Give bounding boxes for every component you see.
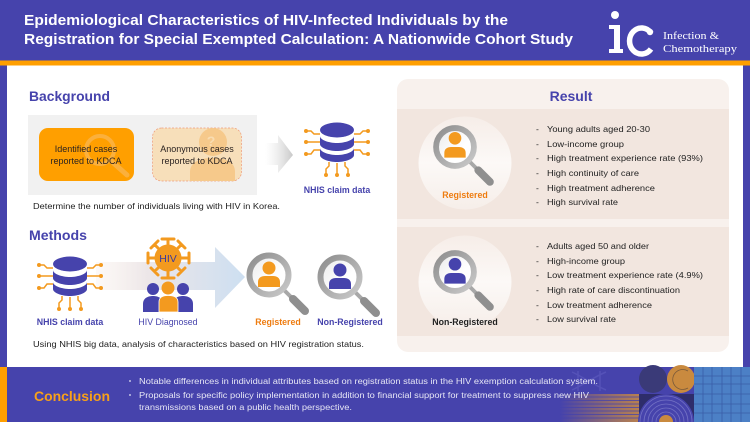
list: registered traits: High continuity of care — [547, 168, 639, 178]
anonymous cases card: Anonymous cases — [160, 144, 234, 154]
icon: non-registered magnifier — [320, 258, 376, 313]
decorative pattern — [560, 365, 750, 422]
journal logo: Infection & — [663, 31, 719, 42]
journal logo: Chemotherapy — [663, 44, 737, 55]
list: non-registered traits: - — [536, 300, 539, 310]
label: NHIS claim data: NHIS claim data — [37, 317, 103, 327]
list: non-registered traits: Low treatment experience rate (4.9%) — [547, 270, 703, 280]
list: registered traits: - — [536, 197, 539, 207]
icon: magnifier non-registered — [436, 253, 490, 307]
anonymous cases card: ? — [207, 133, 215, 149]
panel: background — [28, 88, 370, 211]
conclusion bullets: transmissions based on a public health perspective. — [139, 402, 352, 412]
label: NHIS claim data: NHIS claim data — [304, 185, 370, 195]
list: registered traits: Young adults aged 20-30 — [547, 124, 650, 134]
list: non-registered traits — [536, 241, 703, 324]
heading: background: Background — [29, 88, 110, 104]
methods statement: Using NHIS big data, analysis of characteristics based on HIV registration status. — [33, 339, 364, 349]
anonymous cases card — [152, 128, 242, 181]
list: registered traits: Low-income group — [547, 139, 624, 149]
conclusion bullets — [129, 376, 598, 412]
panel: conclusion — [0, 365, 750, 422]
icon: registered magnifier — [250, 256, 305, 311]
list: non-registered traits: - — [536, 285, 539, 295]
heading: result: Result — [550, 88, 593, 104]
list: non-registered traits: Adults aged 50 and older — [547, 241, 649, 251]
list: non-registered traits: High-income group — [547, 256, 625, 266]
background statement: Determine the number of individuals living with HIV in Korea. — [33, 201, 280, 211]
journal logo — [609, 11, 737, 55]
list: registered traits — [536, 124, 703, 207]
panel: registered — [397, 109, 729, 219]
label: registered: Registered — [255, 317, 301, 327]
list: registered traits: High treatment adherence — [547, 183, 655, 193]
label: HIV diagnosed: HIV Diagnosed — [138, 317, 198, 327]
label: registered: Registered — [442, 190, 488, 200]
label: non-registered: Non-Registered — [432, 317, 498, 327]
panel: result — [397, 79, 729, 352]
conclusion bullets: Proposals for specific policy implementation in addition to financial support for treatment to suppress new HIV — [139, 390, 589, 400]
icon: database — [37, 256, 103, 311]
list: registered traits: High survival rate — [547, 197, 618, 207]
panel: non-registered — [397, 227, 729, 336]
list: registered traits: - — [536, 124, 539, 134]
panel: methods — [29, 227, 383, 349]
heading: conclusion: Conclusion — [34, 388, 110, 404]
title: Epidemiological Characteristics of HIV-Infected Individuals by the — [24, 13, 508, 29]
identified cases card: reported to KDCA — [50, 156, 122, 166]
icon: HIV virus: HIV — [159, 253, 177, 265]
heading: methods: Methods — [29, 227, 87, 243]
conclusion bullets: Notable differences in individual attributes based on registration status in the HIV exemption calculation system. — [139, 376, 598, 386]
list: non-registered traits: - — [536, 314, 539, 324]
identified cases card — [39, 128, 134, 181]
list: non-registered traits: Low survival rate — [547, 314, 616, 324]
list: registered traits: - — [536, 153, 539, 163]
list: registered traits: High treatment experience rate (93%) — [547, 153, 703, 163]
list: non-registered traits: Low treatment adherence — [547, 300, 652, 310]
title: Registration for Special Exempted Calculation: A Nationwide Cohort Study — [24, 32, 574, 48]
list: registered traits: - — [536, 168, 539, 178]
identified cases card: Identified cases — [55, 144, 118, 154]
label: non-registered: Non-Registered — [317, 317, 383, 327]
anonymous cases card: reported to KDCA — [161, 156, 233, 166]
list: non-registered traits: - — [536, 241, 539, 251]
list: non-registered traits: High rate of care discontinuation — [547, 285, 680, 295]
arrow — [265, 135, 293, 173]
list: non-registered traits: - — [536, 270, 539, 280]
header band — [0, 0, 750, 66]
icon: people group — [143, 282, 193, 312]
list: registered traits: - — [536, 139, 539, 149]
case sources box — [28, 115, 257, 195]
list: registered traits: - — [536, 183, 539, 193]
icon: magnifier registered — [436, 128, 490, 182]
icon: database — [304, 122, 370, 177]
arrow — [96, 247, 245, 308]
list: non-registered traits: - — [536, 256, 539, 266]
title — [24, 13, 574, 48]
icon: HIV virus — [148, 239, 189, 278]
